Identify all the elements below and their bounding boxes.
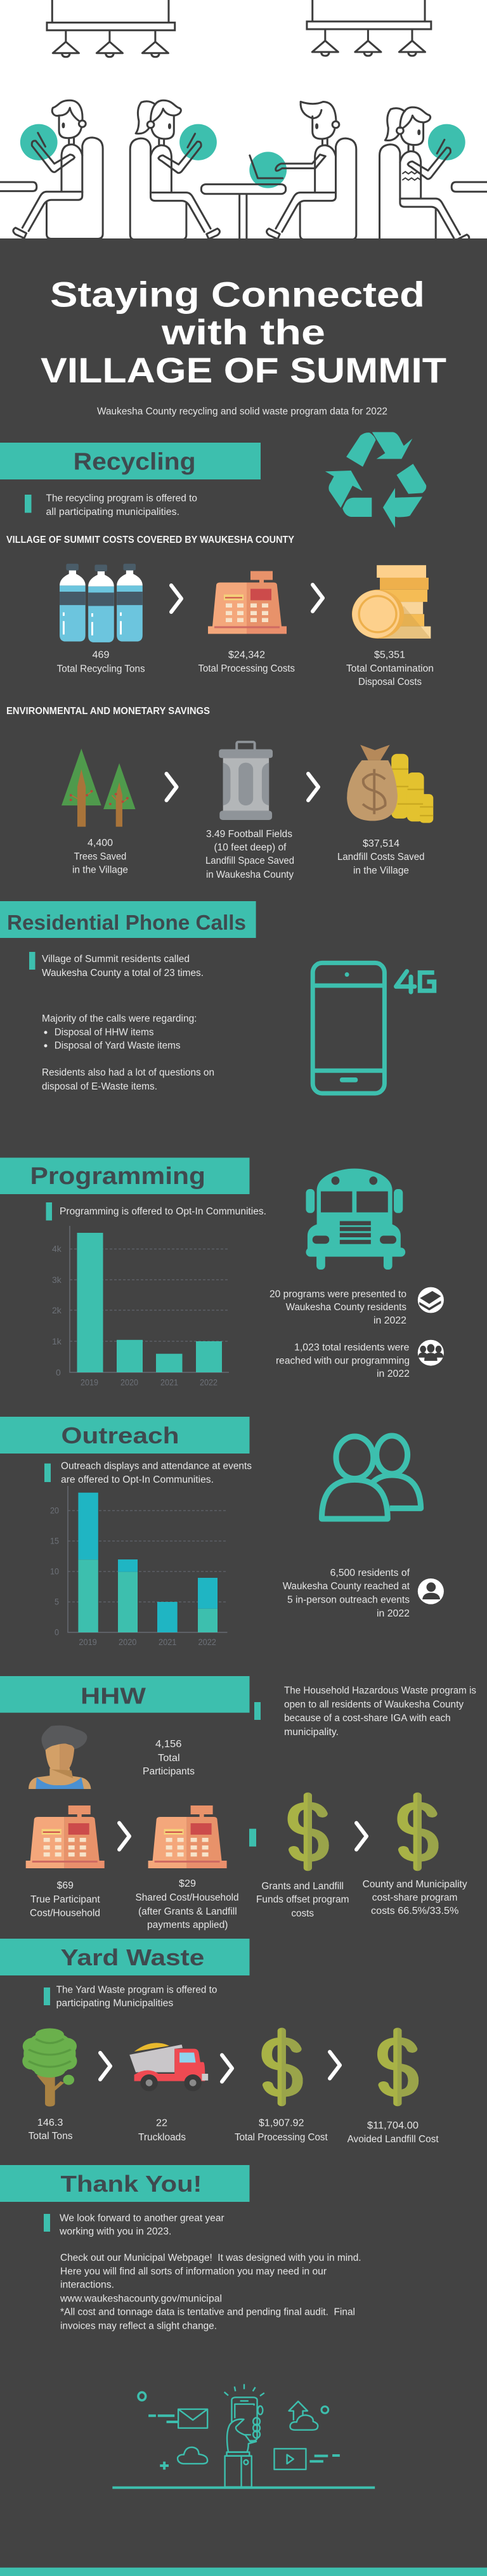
heading: recycling [0,443,261,479]
text: outreach reach: Waukesha County reached at [283,1581,410,1592]
text: outreach reach: in 2022 [377,1608,410,1619]
arrow [356,1823,367,1849]
arrow [166,774,176,800]
label: total processing costs [198,650,295,674]
text: webpage and disclaimer: Check out our Municipal Webpage! It was designed with you in mind. [60,2253,361,2263]
label: truckloads [138,2118,186,2143]
panel: HHW [0,1676,476,1930]
text: programs presented: Waukesha County residents [286,1302,406,1313]
label: grants and landfill funds: costs [291,1908,314,1919]
stacked bar chart: outreach events: 5 [55,1597,59,1607]
icon: hand holding phone with connected media [112,2384,375,2489]
stacked bar chart: outreach events: 10 [50,1566,59,1577]
text: residents reached [276,1343,410,1379]
icon: dollar sign [267,2028,297,2106]
icon: two people outline [321,1436,421,1519]
bar chart: programming residents reached: 0 [56,1367,61,1377]
text: yard waste intro: The Yard Waste program is offered to [56,1985,217,1996]
label: total processing cost: $1,907.92 [259,2118,304,2129]
bar chart: programming residents reached: 2019 [81,1377,98,1388]
title: with the [161,312,325,352]
text: call topics: Disposal of Yard Waste items [55,1041,181,1051]
title: Staying Connected [50,274,425,315]
label: landfill costs saved [337,838,425,876]
text: recycling intro [25,493,197,517]
label: contamination disposal costs: Disposal Costs [358,677,422,687]
text: webpage and disclaimer: interactions. [60,2279,114,2290]
icon: school bus [306,1169,405,1270]
icon: money bag and coins [347,745,433,823]
heading: recycling: Recycling [74,449,196,476]
heading: costs covered: VILLAGE OF SUMMIT COSTS COVERED BY WAUKESHA COUNTY [6,535,294,545]
heading: programming [0,1158,250,1194]
person 3 with laptop [250,101,356,240]
text: yard waste intro: participating Municipalities [56,1998,174,2009]
panel: programming [0,1158,444,1388]
text: residents reached: in 2022 [377,1369,410,1379]
icon: teal circles behind devices [20,124,465,188]
bar chart: programming residents reached: 3k [52,1275,62,1285]
label: total recycling tons [57,650,145,675]
text: call topics: Majority of the calls were regarding: [42,1013,197,1024]
label: trees saved: in the Village [72,865,128,875]
label: avoided landfill cost: Avoided Landfill Cost [347,2134,439,2145]
text: call topics: disposal of E-Waste items. [42,1081,157,1092]
label: total tons: 146.3 [37,2117,63,2128]
text: outreach intro: are offered to Opt-In Communities. [61,1474,214,1485]
label: true participant cost: $69 [57,1880,74,1891]
icon: dollar sign [293,1793,323,1871]
heading: programming: Programming [30,1163,205,1190]
heading: residential phone calls [0,901,256,938]
text: call topics: Disposal of HHW items [55,1027,154,1038]
stacked bar chart: outreach events: 2019 [79,1637,97,1647]
text: calls total: Waukesha County a total of 23 times. [42,968,204,979]
label: truckloads: Truckloads [138,2132,186,2143]
arrow [222,2055,232,2081]
label: cost share: cost-share program [372,1892,458,1903]
text: webpage and disclaimer [60,2253,361,2332]
label: total processing cost [235,2118,328,2143]
text: programs presented: in 2022 [373,1315,406,1326]
label: shared cost: Shared Cost/Household [136,1892,239,1903]
text: outreach reach: 5 in-person outreach events [287,1595,410,1606]
bar chart: programming residents reached: 2022 [200,1377,218,1388]
text: closing note [44,2213,224,2237]
arrow [100,2053,110,2079]
label: landfill costs saved: $37,514 [363,838,399,849]
label: cost share: County and Municipality [363,1879,467,1890]
text: recycling intro: all participating municipalities. [46,507,179,517]
panel: thank you [0,2165,375,2489]
label: cost share [363,1879,467,1916]
person 4 [380,107,469,245]
heading: outreach [0,1417,250,1454]
icon: cash register [148,1805,227,1868]
text: HHW intro: municipality. [284,1727,339,1738]
bar chart: programming residents reached: 2021 [160,1377,178,1388]
icon: 4G smartphone [313,963,434,1093]
text: programming intro: Programming is offered to Opt-In Communities. [60,1206,266,1217]
label: true participant cost: Cost/Household [30,1908,100,1919]
text: call topics [42,1013,214,1092]
text: outreach intro [44,1461,252,1485]
label: trees saved: Trees Saved [74,851,126,862]
label: total processing costs: $24,342 [228,650,265,661]
bar chart: programming residents reached: 2020 [120,1377,138,1388]
label: cost share: costs 66.5%/33.5% [371,1906,459,1916]
label: total processing cost: Total Processing Cost [235,2132,328,2143]
label: landfill space saved [205,829,294,880]
label: shared cost [136,1878,239,1930]
person 2 [130,100,220,240]
arrow [313,585,323,611]
label: shared cost: payments applied) [147,1920,228,1930]
label: total recycling tons: Total Recycling Tons [57,664,145,675]
label: total participants: 4,156 [155,1739,181,1750]
text: webpage and disclaimer: Here you will find all sorts of information you may need in our [60,2267,327,2277]
text: webpage and disclaimer: *All cost and tonnage data is tentative and pending final audit. Final [60,2307,355,2318]
label: avoided landfill cost [347,2121,439,2145]
label: trees saved [72,838,128,875]
label: shared cost: $29 [179,1878,196,1889]
footer band [0,2568,487,2576]
icon: dollar sign [403,1793,433,1871]
person 1 [13,100,103,238]
heading: HHW: HHW [81,1683,146,1709]
text: residents reached: reached with our programming [276,1356,410,1366]
heading: HHW [0,1676,250,1713]
heading: thank you [0,2165,250,2202]
label: total participants [143,1739,195,1777]
icon: person in circle [418,1578,444,1604]
heading: yard waste [0,1939,250,1975]
icon: water bottles [60,564,143,642]
label: contamination disposal costs: Total Contamination [346,663,434,674]
label: true participant cost: True Participant [30,1894,100,1905]
title [41,274,446,390]
text: outreach reach: 6,500 residents of [330,1568,410,1578]
text: programs presented: 20 programs were presented to [269,1289,406,1299]
stacked bar chart: outreach events: 2022 [198,1637,216,1647]
panel: recycling [0,432,434,880]
label: total tons [29,2117,73,2142]
label: grants and landfill funds: Grants and Landfill [261,1881,344,1892]
label: total tons: Total Tons [29,2131,73,2142]
bar chart: programming residents reached: 2k [52,1305,62,1315]
icon: hanging lamp left [47,0,175,57]
text: yard waste intro [44,1985,217,2009]
label: landfill space saved: Landfill Space Saved [205,855,294,866]
label: landfill space saved: in Waukesha County [206,869,294,880]
panel: residential phone calls [0,901,434,1093]
stacked bar chart: outreach events: 2021 [159,1637,177,1647]
stacked bar chart: outreach events [50,1486,227,1647]
heading: residential phone calls: Residential Phone Calls [7,911,246,934]
icon: cash register [26,1805,105,1868]
label: total participants: Total [158,1753,180,1764]
text: webpage and disclaimer: www.waukeshacounty.gov/municipal [60,2293,222,2304]
icon: recycle symbol [325,432,426,528]
text: webpage and disclaimer: invoices may reflect a slight change. [60,2321,217,2332]
icon: hanging lamp right [307,0,431,56]
icon: trash can [219,742,273,820]
icon: dump truck [129,2043,208,2091]
bar chart: programming residents reached: 1k [52,1336,62,1346]
heading: outreach: Outreach [61,1422,179,1448]
header illustration: people at cafe tables with devices [0,0,487,245]
text: calls total [29,952,204,979]
icon: cash register [208,571,287,634]
heading: thank you: Thank You! [61,2171,202,2197]
stacked bar chart: outreach events: 2020 [119,1637,137,1647]
icon: dollar sign [382,2028,413,2106]
text: programming intro [46,1202,266,1220]
bar chart: programming residents reached: 4k [52,1244,62,1254]
text: HHW intro: open to all residents of Waukesha County [284,1700,464,1710]
heading: yard waste: Yard Waste [61,1944,204,1970]
icon: people in circle [418,1340,444,1366]
label: landfill costs saved: Landfill Costs Saved [337,852,425,862]
label: contamination disposal costs [346,650,434,687]
panel: yard waste [0,1939,439,2145]
label: grants and landfill funds [256,1881,349,1919]
label: landfill space saved: 3.49 Football Fields [206,829,292,840]
icon: coins [352,565,431,639]
label: true participant cost [30,1880,100,1919]
label: landfill costs saved: in the Village [353,865,409,876]
bar chart: programming residents reached [52,1226,229,1388]
text: outreach intro: Outreach displays and attendance at events [61,1461,252,1472]
stacked bar chart: outreach events: 15 [50,1536,59,1546]
text: closing note: We look forward to another great year [60,2213,224,2223]
icon: books in circle [418,1287,444,1313]
panel: outreach [0,1417,444,1647]
text: HHW intro [254,1686,476,1738]
label: landfill space saved: (10 feet deep) of [214,842,287,853]
arrow [171,585,181,612]
stacked bar chart: outreach events: 0 [55,1627,59,1637]
label: avoided landfill cost: $11,704.00 [367,2121,419,2131]
arrow [119,1823,129,1849]
text: recycling intro: The recycling program is offered to [46,493,197,504]
label: total recycling tons: 469 [93,650,109,661]
label: total processing costs: Total Processing Costs [198,663,295,674]
arrow [330,2052,340,2079]
label: grants and landfill funds: Funds offset program [256,1894,349,1905]
text: call topics: Residents also had a lot of questions on [42,1067,214,1078]
accent bar [249,1829,256,1847]
text: HHW intro: The Household Hazardous Waste program is [284,1686,476,1696]
text: programs presented [269,1289,406,1326]
text: calls total: Village of Summit residents called [42,954,190,965]
stacked bar chart: outreach events: 20 [50,1506,59,1516]
label: contamination disposal costs: $5,351 [374,650,405,661]
text: HHW intro: because of a cost-share IGA with each [284,1713,451,1724]
label: truckloads: 22 [156,2118,167,2129]
text: closing note: working with you in 2023. [59,2227,171,2237]
heading: savings: ENVIRONMENTAL AND MONETARY SAVINGS [6,706,210,717]
title: VILLAGE OF SUMMIT [41,350,446,390]
icon: green tree [22,2028,77,2107]
label: shared cost: (after Grants & Landfill [138,1906,237,1917]
label: total participants: Participants [143,1766,195,1777]
text: residents reached: 1,023 total residents were [294,1343,410,1353]
text: outreach reach [283,1568,410,1619]
label: trees saved: 4,400 [88,838,113,849]
arrow [308,774,318,800]
icon: trees [62,749,136,827]
icon: participant portrait [29,1726,91,1789]
icon: tables [0,182,487,238]
subtitle: Waukesha County recycling and solid waste program data for 2022 [97,406,387,417]
